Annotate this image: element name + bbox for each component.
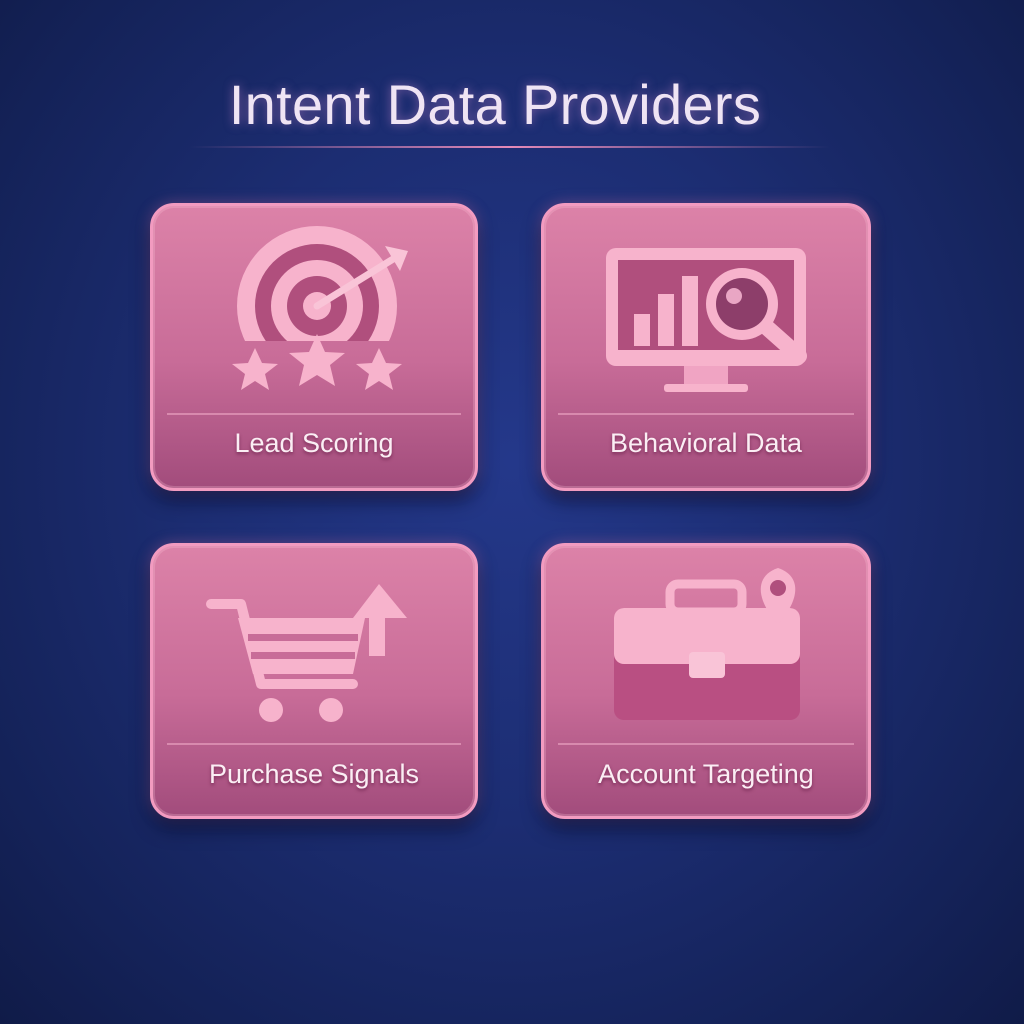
- panel: account targeting: [541, 543, 871, 819]
- label: Lead Scoring: [234, 428, 394, 458]
- label: Account Targeting: [598, 759, 814, 789]
- title: Intent Data Providers: [229, 73, 761, 136]
- panel: lead scoring: [150, 203, 478, 491]
- icon: shopping cart with up arrow: [206, 584, 407, 722]
- panel: purchase signals: [150, 543, 478, 819]
- panel: behavioral data: [541, 203, 871, 491]
- label: Behavioral Data: [610, 428, 802, 458]
- icon: monitor with chart and magnifier: [606, 248, 807, 392]
- icon: briefcase with location pin: [614, 568, 800, 720]
- icon: target with arrow and stars: [232, 226, 408, 390]
- label: Purchase Signals: [209, 759, 419, 789]
